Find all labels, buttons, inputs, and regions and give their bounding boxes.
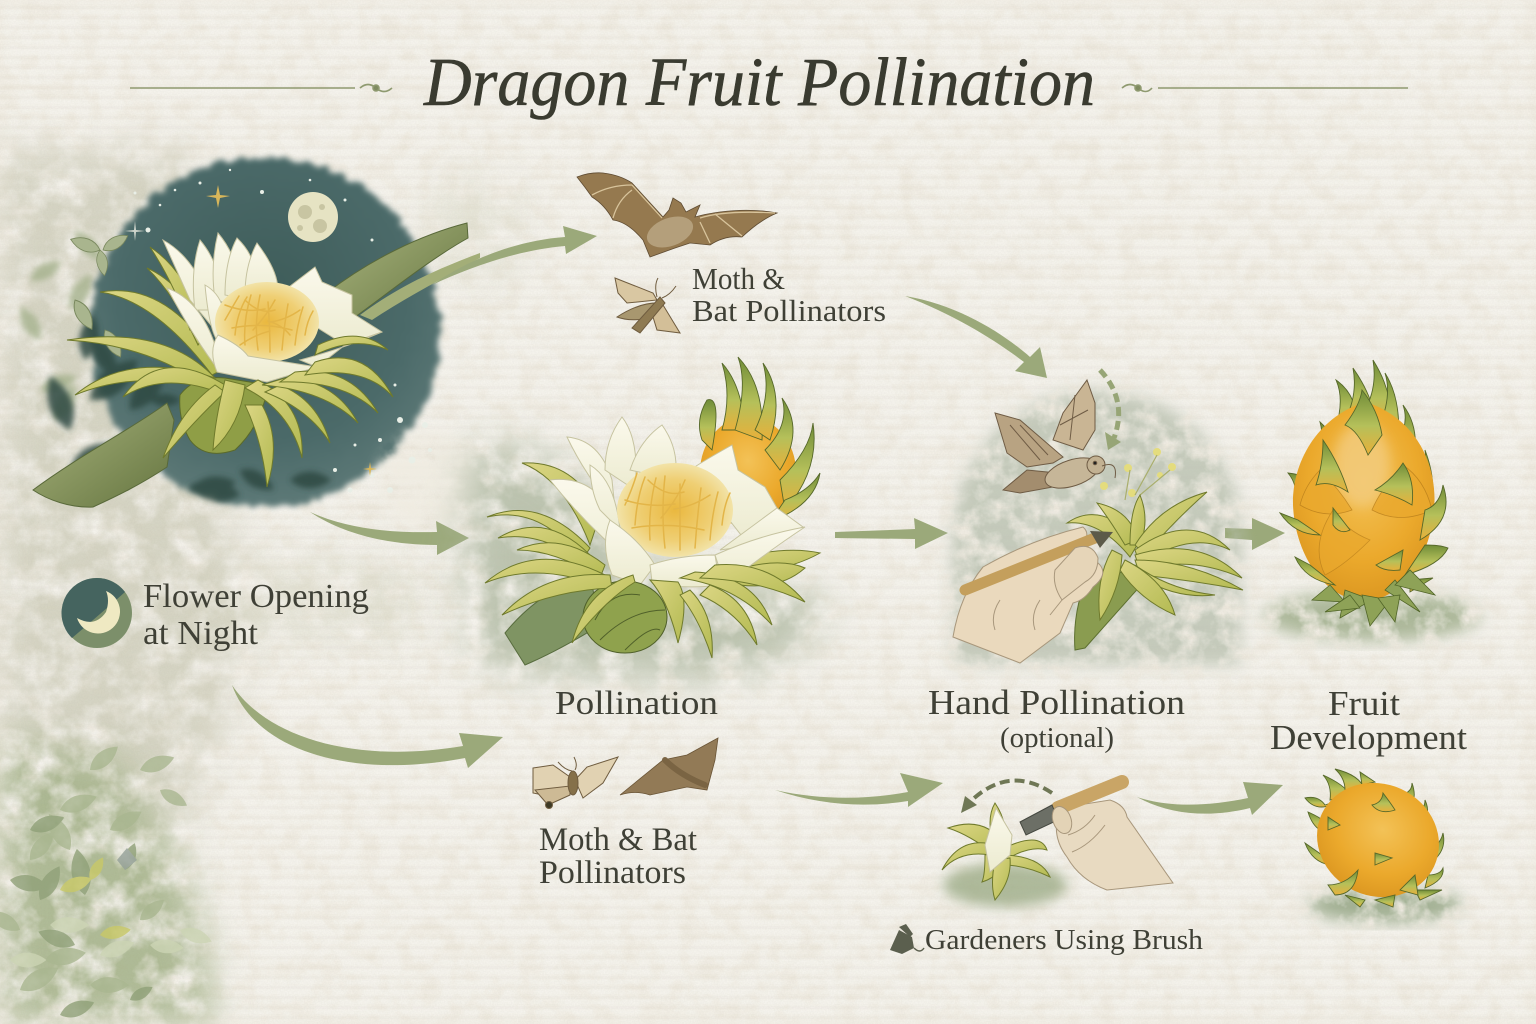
arrow: pollinators to gardener (775, 773, 943, 807)
front petals (605, 520, 805, 587)
icon: bat, upper (577, 173, 777, 257)
white petals (163, 233, 382, 372)
label: moth and bat pollinators, lower: Pollinators (539, 855, 686, 891)
foliage: bottom-left corner (0, 741, 214, 1022)
brush handle (1058, 782, 1122, 808)
arrow: hand pollination to fruit (1225, 518, 1285, 550)
sepals front (502, 564, 805, 658)
label: flower opening at night: at Night (143, 615, 259, 652)
front petals (213, 335, 317, 382)
label: moth and bat pollinators, lower (539, 822, 697, 891)
ground wash (1307, 887, 1463, 923)
pale halo (952, 390, 1242, 665)
stem (1075, 570, 1150, 650)
thumb (1054, 546, 1098, 600)
ground shadow (1264, 591, 1480, 641)
sepals (1067, 492, 1243, 620)
pale dissolve at lower right of the sky (380, 432, 480, 528)
ground wash (943, 863, 1067, 907)
label: moth and bat pollinators, lower: Moth & Bat (539, 822, 697, 858)
bud base (180, 378, 268, 453)
stamens (215, 282, 319, 362)
arrow: pollination to hand pollination (835, 518, 948, 549)
night sky circle (90, 157, 440, 507)
label: gardeners using brush: Gardeners Using Brush (925, 924, 1204, 956)
inner scales (1328, 793, 1418, 907)
icon: moth, upper (615, 278, 680, 333)
scales (1280, 390, 1448, 592)
icon: gardener brush (890, 924, 924, 954)
hand (953, 527, 1103, 663)
moon (288, 192, 338, 242)
arrow: night flower to pollination (310, 512, 469, 555)
illustration: large dragon fruit (1264, 360, 1480, 641)
fruit base leaves (1312, 570, 1435, 626)
hand (1056, 800, 1173, 890)
label: fruit development: Development (1270, 718, 1467, 757)
dark leaf (505, 575, 600, 665)
left foliage haze (14, 225, 125, 424)
title ornament left (130, 84, 392, 92)
title ornament right (1122, 84, 1408, 92)
illustration: small flower with brush (942, 781, 1173, 907)
label: moth and bat pollinators, upper: Moth & (692, 261, 785, 296)
small flower petals (942, 803, 1050, 900)
dark foliage inside the sky (40, 312, 332, 505)
icon: bat, lower (620, 738, 718, 795)
label: hand pollination: Hand Pollination (928, 683, 1185, 722)
leaves beside the sky (69, 231, 131, 360)
sepals behind (67, 247, 222, 388)
paintbrush (965, 531, 1113, 590)
fruit body (1293, 402, 1435, 601)
outer spikes (1305, 769, 1444, 900)
bud segment lines (595, 594, 665, 650)
icon: moth, lower (533, 757, 618, 808)
sepals front (75, 336, 393, 487)
sepals behind (485, 463, 820, 590)
label: fruit development (1270, 684, 1467, 757)
label: fruit development: Fruit (1328, 684, 1400, 723)
illustration: pollination flower and fruit (462, 357, 830, 680)
moth (995, 380, 1115, 494)
arrow: night flower to pollinators (432, 226, 597, 285)
cactus stems (33, 403, 174, 507)
label: flower opening at night: Flower Opening (143, 578, 369, 615)
icon: moon phase (61, 578, 132, 648)
finger creases (993, 600, 1062, 630)
finger creases (1068, 815, 1105, 852)
title: Dragon Fruit Pollination (423, 44, 1095, 120)
bud (583, 581, 667, 653)
fruit behind the flower (700, 417, 796, 527)
illustration: hand pollination (952, 370, 1243, 665)
brush ferrule (1020, 805, 1058, 835)
skirts of scales (1300, 465, 1432, 575)
label: hand pollination (928, 683, 1185, 754)
arrow: pollinators to hand pollination (905, 296, 1047, 378)
label: moth and bat pollinators, upper (692, 261, 886, 328)
label: flower opening at night (143, 578, 369, 652)
dashed motion arc (1100, 370, 1119, 438)
white petals (550, 417, 803, 570)
illustration: small dragon fruit (1298, 763, 1463, 923)
label: pollination: Pollination (555, 685, 718, 722)
illustration: flower opening at night (14, 157, 480, 528)
flower buds (1100, 448, 1176, 497)
label: hand pollination: (optional) (1000, 723, 1114, 754)
mottled wash behind flower (462, 445, 830, 680)
small fruit body (1298, 763, 1458, 917)
top spikes (1288, 360, 1432, 510)
arrow: gardener to small fruit (1137, 782, 1283, 815)
label: moth and bat pollinators, upper: Bat Pollinators (692, 293, 886, 328)
dashed motion arc (972, 781, 1052, 800)
stamens (617, 463, 733, 557)
stars (134, 169, 432, 493)
arrow: night flower to pollination lower (232, 685, 503, 768)
fruit highlight (1334, 423, 1390, 507)
thumb (1049, 804, 1075, 836)
